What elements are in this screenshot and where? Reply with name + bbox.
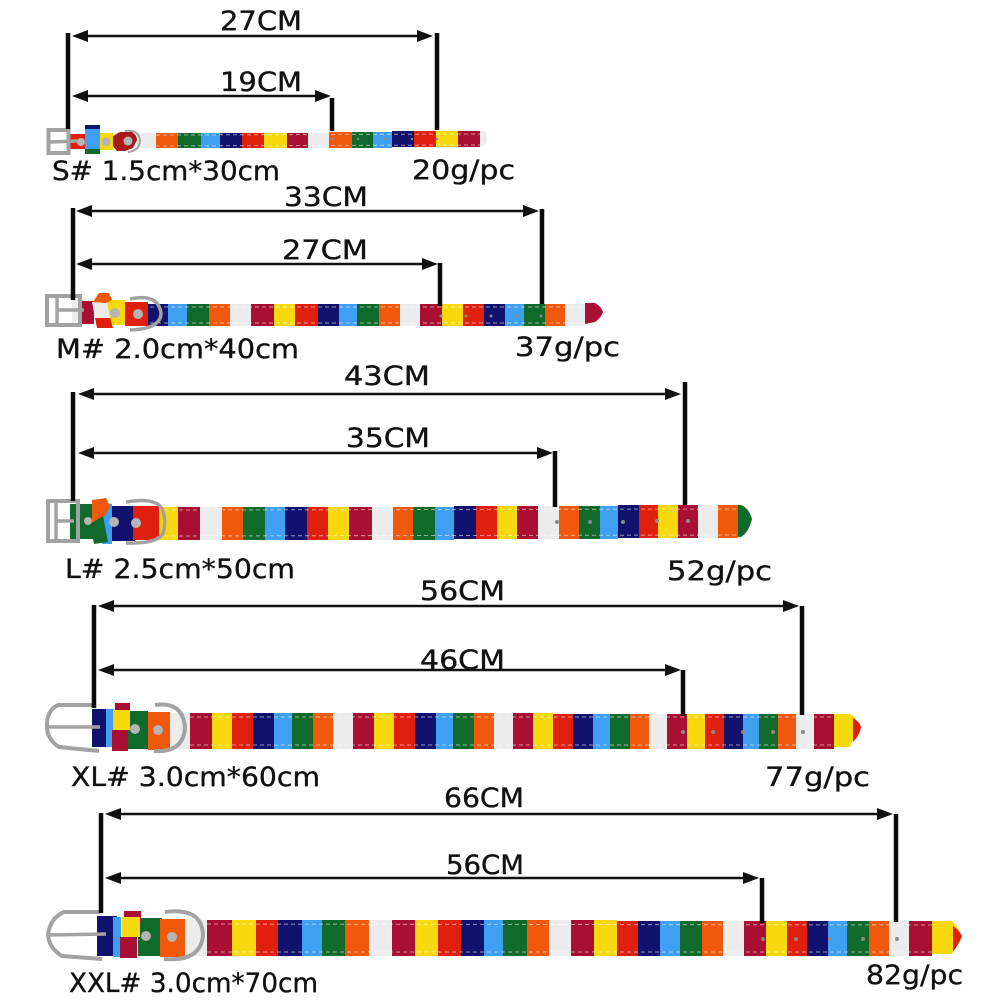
L size label: L# 2.5cm*50cm	[65, 554, 295, 585]
L arrow 35CM	[78, 447, 553, 459]
XL arrow 56CM	[98, 600, 799, 612]
XXL markers	[101, 813, 896, 923]
XXL buckle and keeper	[47, 911, 203, 959]
S length label 19CM: 19CM	[220, 67, 302, 98]
S markers	[68, 33, 437, 131]
XL size label: XL# 3.0cm*60cm	[71, 762, 320, 793]
L collar strap	[158, 505, 752, 540]
S collar strap	[137, 131, 487, 148]
S arrow 19CM	[72, 90, 331, 102]
S weight label: 20g/pc	[412, 155, 515, 186]
XL length label 46CM: 46CM	[420, 645, 505, 676]
size XXL panel	[47, 783, 963, 999]
S buckle and keeper	[48, 125, 140, 154]
XXL length label 66CM: 66CM	[444, 783, 524, 814]
XXL length label 56CM: 56CM	[446, 850, 524, 881]
XL markers	[94, 605, 802, 716]
M buckle and keeper	[47, 293, 161, 330]
M weight label: 37g/pc	[515, 332, 620, 363]
M length label 33CM: 33CM	[284, 182, 368, 213]
XL buckle and keeper	[47, 703, 185, 751]
M markers	[73, 208, 542, 306]
M size label: M# 2.0cm*40cm	[56, 334, 299, 365]
size XL panel	[47, 576, 870, 793]
XXL arrow 56CM	[105, 872, 759, 884]
size L panel	[48, 361, 772, 587]
XXL arrow 66CM	[105, 808, 893, 820]
M arrow 33CM	[76, 205, 539, 217]
size M panel	[47, 182, 620, 365]
L length label 35CM: 35CM	[346, 423, 430, 454]
XL length label 56CM: 56CM	[420, 576, 505, 607]
XXL weight label: 82g/pc	[866, 960, 963, 991]
M length label 27CM: 27CM	[282, 235, 368, 266]
size S panel	[48, 6, 515, 187]
M collar strap	[147, 303, 603, 326]
L weight label: 52g/pc	[667, 556, 772, 587]
L length label 43CM: 43CM	[344, 361, 430, 392]
S length label 27CM: 27CM	[220, 6, 302, 37]
S arrow 27CM	[72, 30, 433, 42]
XL weight label: 77g/pc	[765, 762, 870, 793]
L buckle and keeper	[48, 498, 165, 544]
XL collar strap	[170, 713, 861, 749]
M arrow 27CM	[76, 258, 438, 270]
XXL collar strap	[185, 920, 962, 956]
XL arrow 46CM	[98, 664, 681, 676]
L markers	[73, 382, 685, 507]
L arrow 43CM	[78, 388, 681, 400]
S size label: S# 1.5cm*30cm	[52, 156, 280, 187]
XXL size label: XXL# 3.0cm*70cm	[69, 968, 318, 999]
